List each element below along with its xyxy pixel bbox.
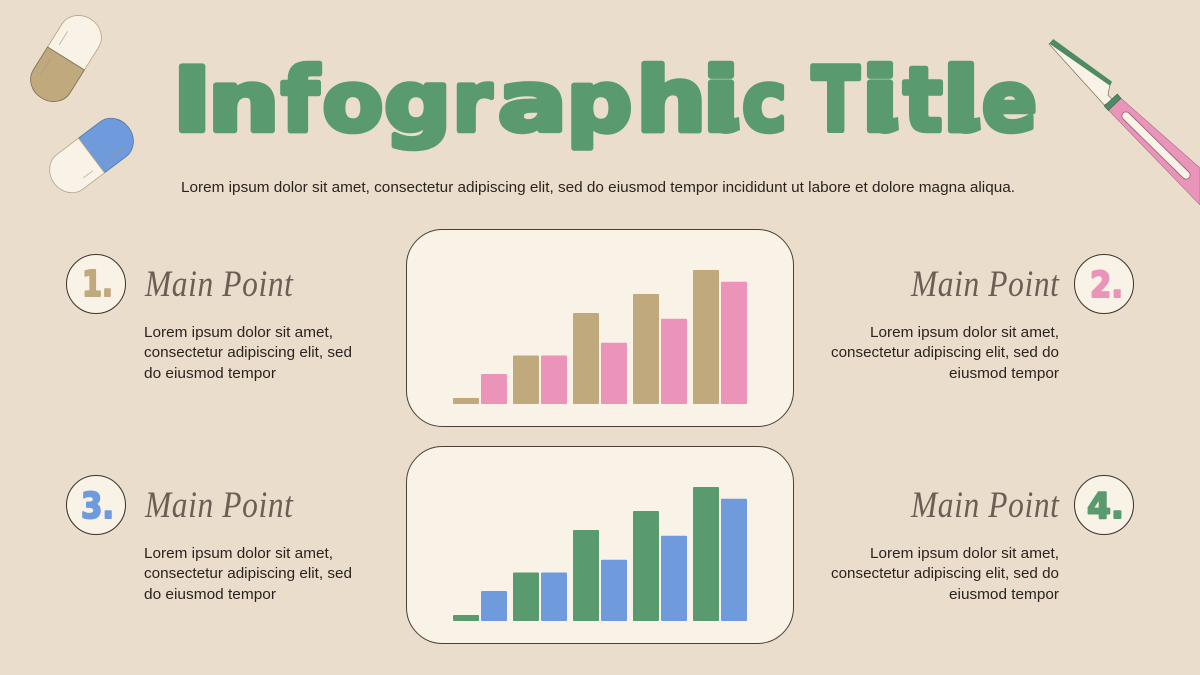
text block 3 bbox=[144, 545, 352, 603]
title: i bbox=[702, 48, 740, 152]
subtitle: Lorem ipsum dolor sit amet, consectetur adipiscing elit, sed do eiusmod tempor incididunt ut labore et dolore magna aliqua. bbox=[181, 179, 1015, 196]
bars: green series bbox=[453, 487, 719, 621]
text block 3: consectetur adipiscing elit, sed bbox=[144, 565, 352, 582]
text block 4: Lorem ipsum dolor sit amet, bbox=[870, 545, 1059, 562]
icon: blue and white capsule bbox=[41, 110, 142, 201]
title: g bbox=[384, 54, 451, 150]
title: T bbox=[812, 48, 859, 152]
text block 1: do eiusmod tempor bbox=[144, 365, 276, 382]
title: I bbox=[172, 48, 212, 152]
bars: blue series bbox=[481, 499, 747, 621]
panel: bottom bar chart bbox=[406, 446, 794, 644]
panel: top bar chart bbox=[406, 230, 794, 426]
title bbox=[172, 48, 1037, 152]
panel: main point 3 bbox=[66, 476, 352, 603]
text block 3: do eiusmod tempor bbox=[144, 586, 276, 603]
number badge 3: 3. bbox=[81, 486, 114, 527]
text block 4: consectetur adipiscing elit, sed do bbox=[831, 565, 1059, 582]
text block 4 bbox=[831, 545, 1059, 603]
title: l bbox=[942, 48, 980, 152]
number badge 4: 4. bbox=[1087, 486, 1124, 527]
heading 1: Main Point bbox=[144, 264, 294, 305]
title: a bbox=[498, 54, 567, 150]
text block 1: consectetur adipiscing elit, sed bbox=[144, 344, 352, 361]
text block 4: eiusmod tempor bbox=[949, 586, 1059, 603]
number badge 1: 1. bbox=[82, 264, 113, 305]
title: p bbox=[567, 54, 632, 150]
icon: beige and white capsule bbox=[23, 8, 109, 109]
icon: pink scalpel bbox=[1049, 39, 1200, 205]
text block 1: Lorem ipsum dolor sit amet, bbox=[144, 324, 333, 341]
title: f bbox=[281, 48, 320, 152]
panel: main point 4 bbox=[831, 476, 1134, 603]
panel: main point 1 bbox=[66, 254, 352, 382]
text block 2 bbox=[831, 324, 1059, 382]
bars: beige series bbox=[453, 270, 719, 404]
title: r bbox=[453, 54, 492, 150]
bars: pink series bbox=[481, 282, 747, 404]
text block 2: consectetur adipiscing elit, sed do bbox=[831, 344, 1059, 361]
heading 3: Main Point bbox=[144, 485, 294, 526]
heading 4: Main Point bbox=[910, 485, 1060, 526]
heading 2: Main Point bbox=[910, 264, 1060, 305]
title: c bbox=[742, 54, 787, 150]
text block 2: Lorem ipsum dolor sit amet, bbox=[870, 324, 1059, 341]
title: n bbox=[208, 54, 279, 150]
number badge 1 bbox=[66, 254, 126, 314]
title: t bbox=[903, 48, 942, 152]
text block 2: eiusmod tempor bbox=[949, 365, 1059, 382]
number badge 2: 2. bbox=[1090, 265, 1123, 306]
text block 1 bbox=[144, 324, 352, 382]
title: o bbox=[323, 54, 383, 150]
number badge 4 bbox=[1074, 476, 1134, 534]
text block 3: Lorem ipsum dolor sit amet, bbox=[144, 545, 333, 562]
panel: main point 2 bbox=[831, 254, 1134, 382]
title: i bbox=[861, 48, 899, 152]
title: h bbox=[636, 48, 706, 152]
number badge 2 bbox=[1074, 254, 1134, 314]
title: e bbox=[982, 54, 1037, 150]
number badge 3 bbox=[66, 476, 126, 534]
